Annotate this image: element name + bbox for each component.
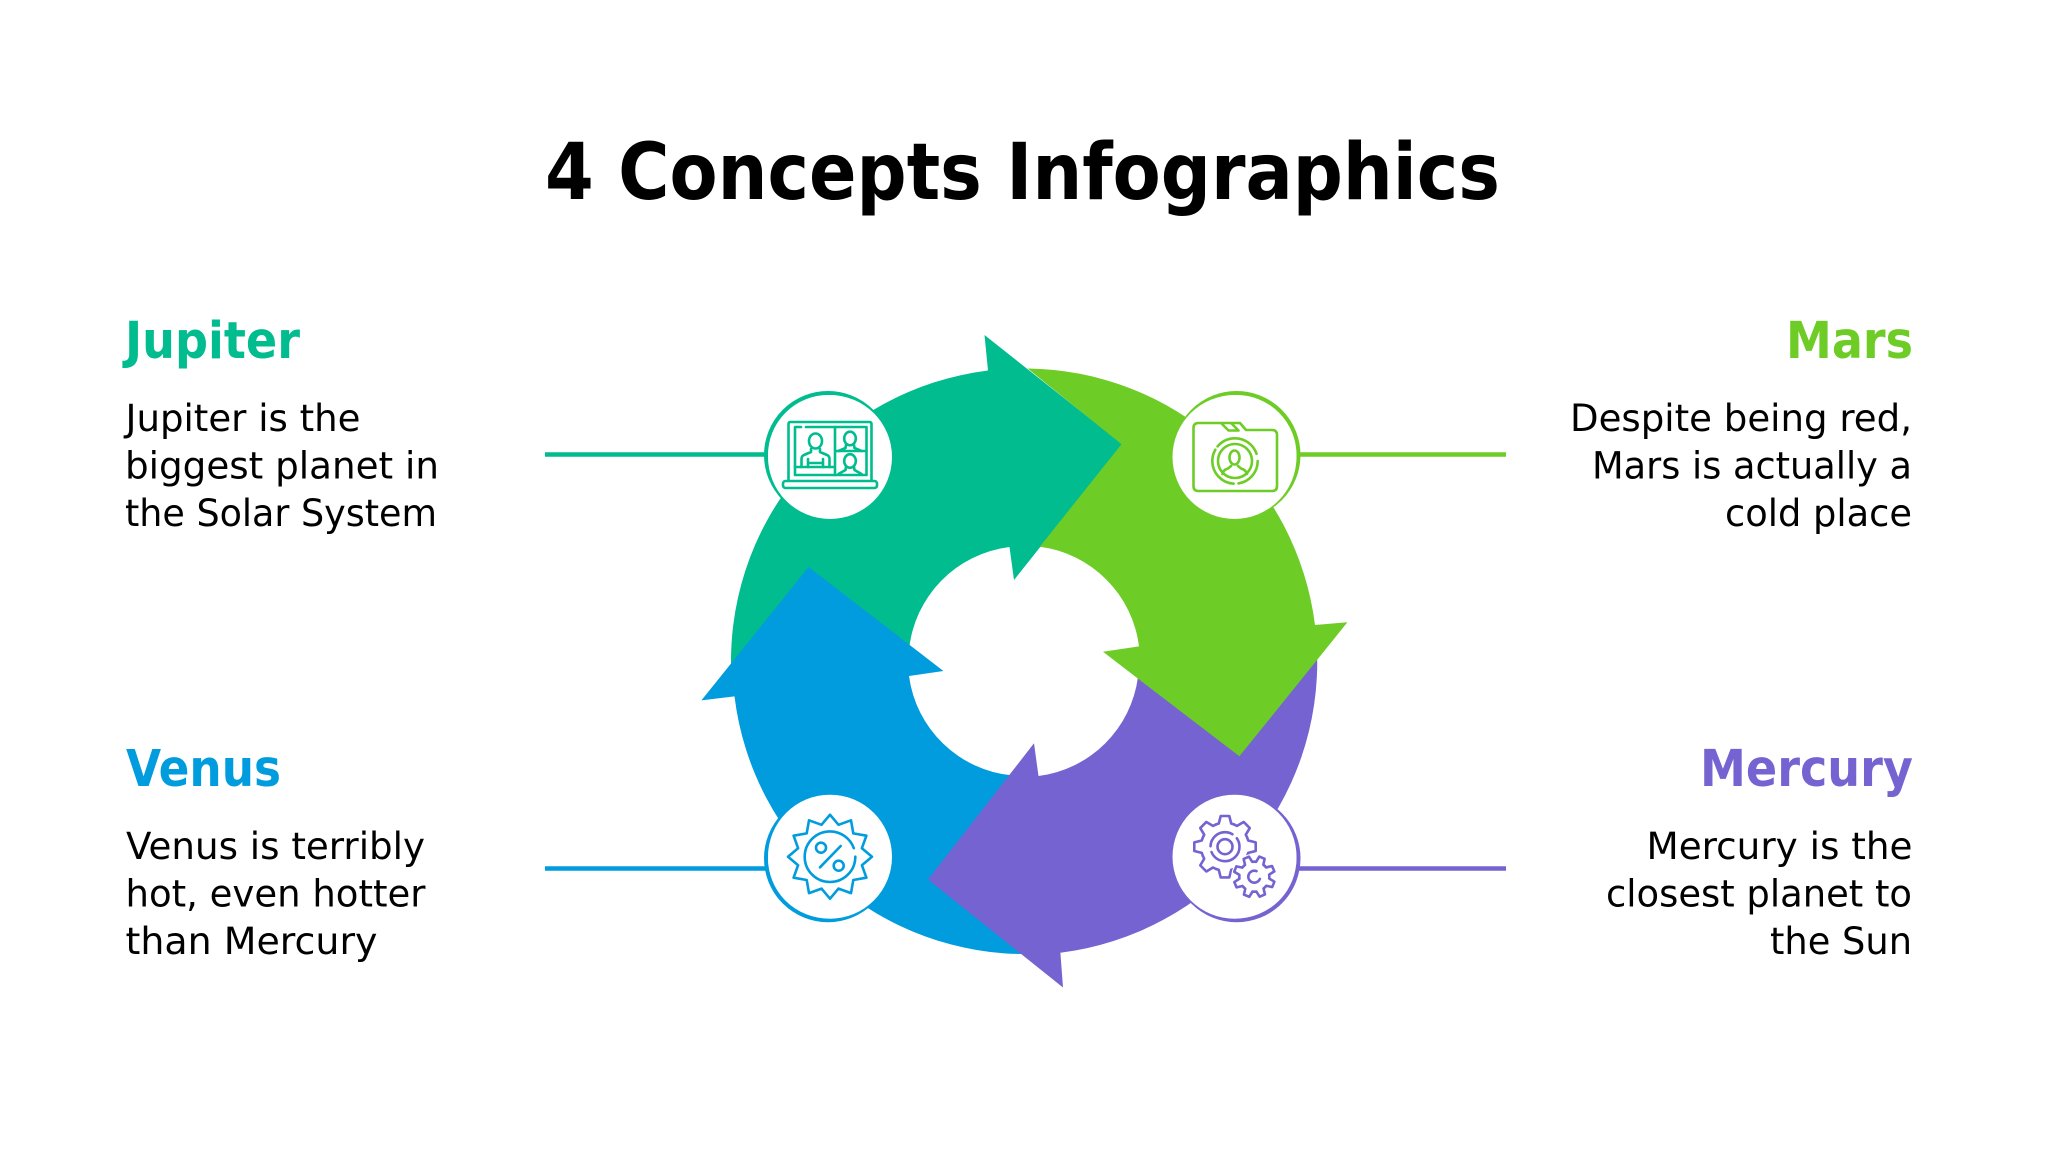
heading: Mercury: Mercury — [1700, 740, 1913, 799]
body: Jupiter: biggest planet in — [125, 444, 439, 488]
body: Mars: cold place — [1725, 492, 1912, 535]
body: Mercury — [1606, 825, 1912, 963]
body: Jupiter — [123, 397, 439, 535]
title: 4 Concepts Infographics — [545, 128, 1500, 218]
cycle diagram: four arrows — [701, 335, 1347, 988]
text block: Mars — [1570, 312, 1913, 535]
body: Jupiter: Jupiter is the — [123, 397, 360, 440]
body: Mars: Mars is actually a — [1592, 444, 1912, 488]
icon badge: Mars profile folder — [1172, 393, 1298, 519]
body: Mars — [1570, 397, 1912, 535]
body: Mercury: Mercury is the — [1646, 825, 1912, 868]
icon badge: Jupiter video call laptop — [766, 393, 892, 519]
arrow: Jupiter teal — [731, 335, 1122, 680]
heading: Mars: Mars — [1786, 312, 1913, 371]
heading: Jupiter: Jupiter — [122, 312, 300, 371]
body: Mercury: closest planet to — [1606, 872, 1912, 916]
arrow: Mercury purple — [928, 650, 1317, 988]
body: Venus — [126, 825, 426, 963]
arrow: Mars green — [1028, 368, 1347, 756]
body: Venus: hot, even hotter — [126, 872, 426, 916]
connector line: Mars — [1295, 452, 1506, 457]
body: Jupiter: the Solar System — [125, 492, 437, 535]
icon badge: Venus percent badge — [766, 795, 892, 920]
arrow: Venus blue — [701, 567, 1030, 954]
body: Venus: than Mercury — [126, 920, 378, 963]
body: Mercury: the Sun — [1770, 920, 1912, 963]
connector line: Venus — [545, 866, 770, 871]
body: Venus: Venus is terribly — [126, 825, 425, 868]
connector line: Mercury — [1295, 866, 1506, 871]
body: Mars: Despite being red, — [1570, 397, 1912, 440]
connector line: Jupiter — [545, 452, 770, 457]
text block: Mercury — [1606, 740, 1913, 963]
icon badge: Mercury gears — [1172, 795, 1298, 920]
heading: Venus: Venus — [126, 740, 281, 799]
text block: Venus — [126, 740, 426, 963]
text block: Jupiter — [122, 312, 439, 535]
